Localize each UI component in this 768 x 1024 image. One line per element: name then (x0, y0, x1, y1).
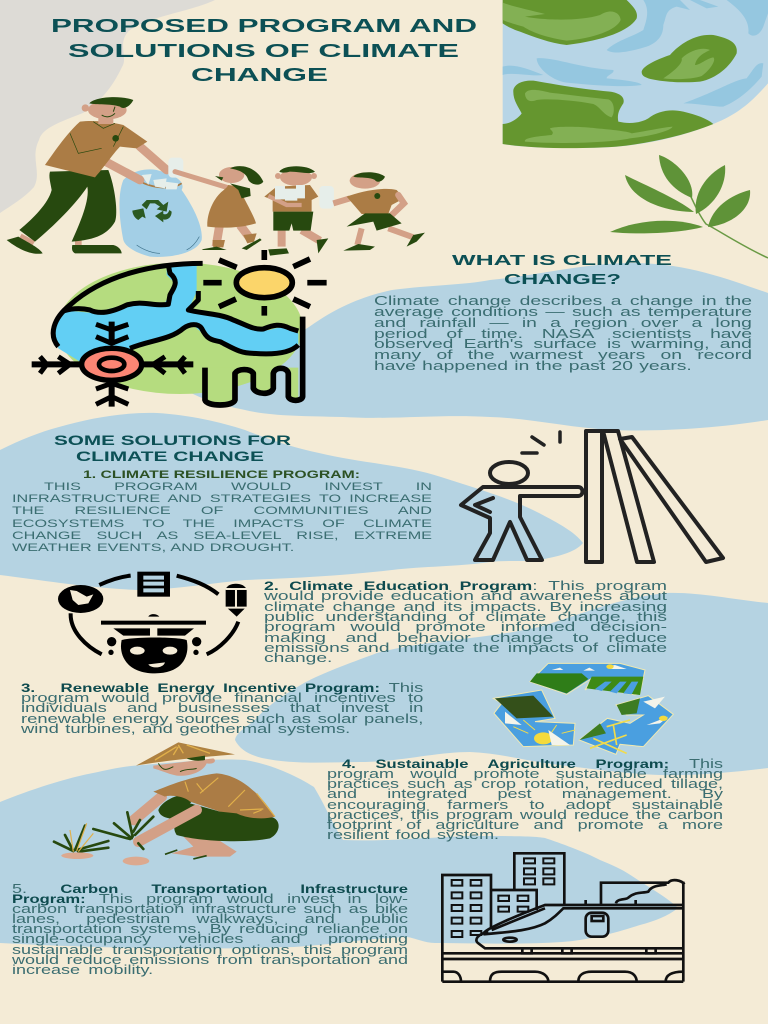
heading: climate resilience program: 1. CLIMATE RESILIENCE PROGRAM: (83, 469, 360, 481)
blue wash: what is climate change (191, 263, 768, 431)
text block: what is climate change (374, 293, 752, 373)
title: PROPOSED PROGRAM AND (51, 15, 477, 36)
text block: carbon transportation infrastructure program: lanes, pedestrian walkways, and public (12, 912, 408, 926)
text block: renewable energy incentive program: renewable energy sources such as solar panels, (21, 712, 423, 726)
grey texture corner (0, 0, 215, 213)
icon: renewable energy recycling arrows (493, 663, 673, 754)
text block: sustainable agriculture program: practices such as crop rotation, reduced tillage, (327, 777, 723, 791)
text block: climate education program: change. (264, 651, 332, 665)
text block: sustainable agriculture program: resilient food system. (327, 828, 499, 842)
boy running (319, 172, 425, 251)
text block: sustainable agriculture program: 4. Sustainable Agriculture Program: This (342, 757, 723, 771)
heading: some solutions: CLIMATE CHANGE (76, 449, 264, 464)
man (7, 97, 183, 254)
title (51, 15, 477, 85)
text block: sustainable agriculture program: practices, this program would reduce the carbon (327, 808, 723, 822)
text block: climate resilience program (12, 481, 432, 554)
heading: what is climate change (452, 253, 673, 288)
title: CHANGE (191, 64, 328, 85)
recycling bag (119, 169, 202, 257)
text block: carbon transportation infrastructure program: transportation systems. By reducing reliance on (12, 922, 408, 936)
heading: some solutions (54, 433, 291, 464)
girl (175, 166, 263, 250)
icon: education (58, 572, 247, 673)
text block: what is climate change: observed Earth's surface is warming, and (374, 336, 752, 351)
text block: climate resilience program: ECOSYSTEMS TO THE IMPACTS OF CLIMATE (12, 518, 432, 530)
text block: carbon transportation infrastructure program: would reduce emissions from transportation and (12, 953, 408, 967)
text block: what is climate change: and rainfall — in a region over a long (374, 314, 752, 330)
icon: city with train (442, 853, 684, 982)
text block: sustainable agriculture program: footprint of agriculture and promote a more (327, 818, 723, 832)
text block: what is climate change: have happened in the past 20 years. (374, 358, 692, 373)
text block: what is climate change: average conditions — such as temperature (374, 304, 752, 319)
text block: climate education program: public understanding of climate change, this (264, 610, 667, 624)
text block: climate education program: making and behavior change to reduce (264, 631, 667, 645)
text block: what is climate change: many of the warmest years on record (374, 347, 752, 362)
text block: sustainable agriculture program: encouraging farmers to adopt sustainable (327, 798, 723, 812)
text block: climate resilience program: THIS PROGRAM WOULD INVEST IN (44, 481, 432, 493)
text block: carbon transportation infrastructure program: carbon transportation infrastructure such as bike (12, 902, 408, 916)
text block: climate education program: climate change and its impacts. By increasing (264, 600, 667, 614)
blue wash: some solutions (0, 413, 583, 590)
heading: what is climate change: CHANGE? (504, 272, 621, 288)
text block: renewable energy incentive program: wind turbines, and geothermal systems. (21, 722, 350, 736)
text block: carbon transportation infrastructure program: sustainable transportation options, this program (12, 943, 408, 957)
title: SOLUTIONS OF CLIMATE (68, 40, 459, 61)
text block: climate education program: 2. Climate Education Program: This program (264, 579, 667, 593)
blue wash: middle right (235, 593, 768, 775)
globe illustration (503, 0, 768, 148)
text block: what is climate change: Climate change describes a change in the (374, 293, 752, 308)
icon: earth with sun and snowflake (32, 250, 327, 407)
text block: climate resilience program: INFRASTRUCTURE AND STRATEGIES TO INCREASE (12, 493, 432, 505)
text block: carbon transportation infrastructure program: Program: This program would invest in low- (12, 892, 408, 906)
text block: carbon transportation infrastructure program: 5. Carbon Transportation Infrastructure (12, 882, 408, 896)
text block: climate education program: would provide education and awareness about (264, 589, 667, 603)
icon: person with leaning boards (461, 431, 723, 562)
text block: climate education program: emissions and mitigate the impacts of climate (264, 641, 667, 655)
text block: carbon transportation infrastructure program: increase mobility. (12, 963, 153, 977)
blue wash: farmer and transport (0, 759, 678, 948)
heading: some solutions: SOME SOLUTIONS FOR (54, 433, 291, 448)
text block: renewable energy incentive program: 3. Renewable Energy Incentive Program: This (21, 681, 423, 695)
icon: plant leaves (610, 155, 768, 258)
text block: renewable energy incentive program (21, 681, 423, 736)
text block: climate education program (264, 579, 667, 665)
text block: renewable energy incentive program: program would provide financial incentives to (21, 691, 423, 705)
text block: climate resilience program: WEATHER EVENTS, AND DROUGHT. (12, 542, 294, 554)
heading: what is climate change: WHAT IS CLIMATE (452, 253, 673, 269)
illustration: farmer planting (54, 742, 279, 865)
text block: climate resilience program: CHANGE SUCH AS SEA-LEVEL RISE, EXTREME (12, 530, 432, 542)
text block: carbon transportation infrastructure program: single-occupancy vehicles and promoting (12, 932, 408, 946)
illustration: family recycling (7, 97, 425, 257)
text block: sustainable agriculture program: and integrated pest management. By (327, 787, 723, 801)
text block: carbon transportation infrastructure program (12, 882, 408, 977)
text block: sustainable agriculture program: program would promote sustainable farming (327, 767, 723, 781)
text block: renewable energy incentive program: individuals and businesses that invest in (21, 701, 423, 715)
text block: what is climate change: period of time. NASA scientists have (374, 326, 752, 340)
text block: climate resilience program: THE RESILIENCE OF COMMUNITIES AND (12, 505, 432, 517)
text block: climate education program: program would promote informed decision- (264, 620, 667, 634)
boy with bottles (264, 166, 328, 256)
text block: sustainable agriculture program (327, 757, 723, 842)
